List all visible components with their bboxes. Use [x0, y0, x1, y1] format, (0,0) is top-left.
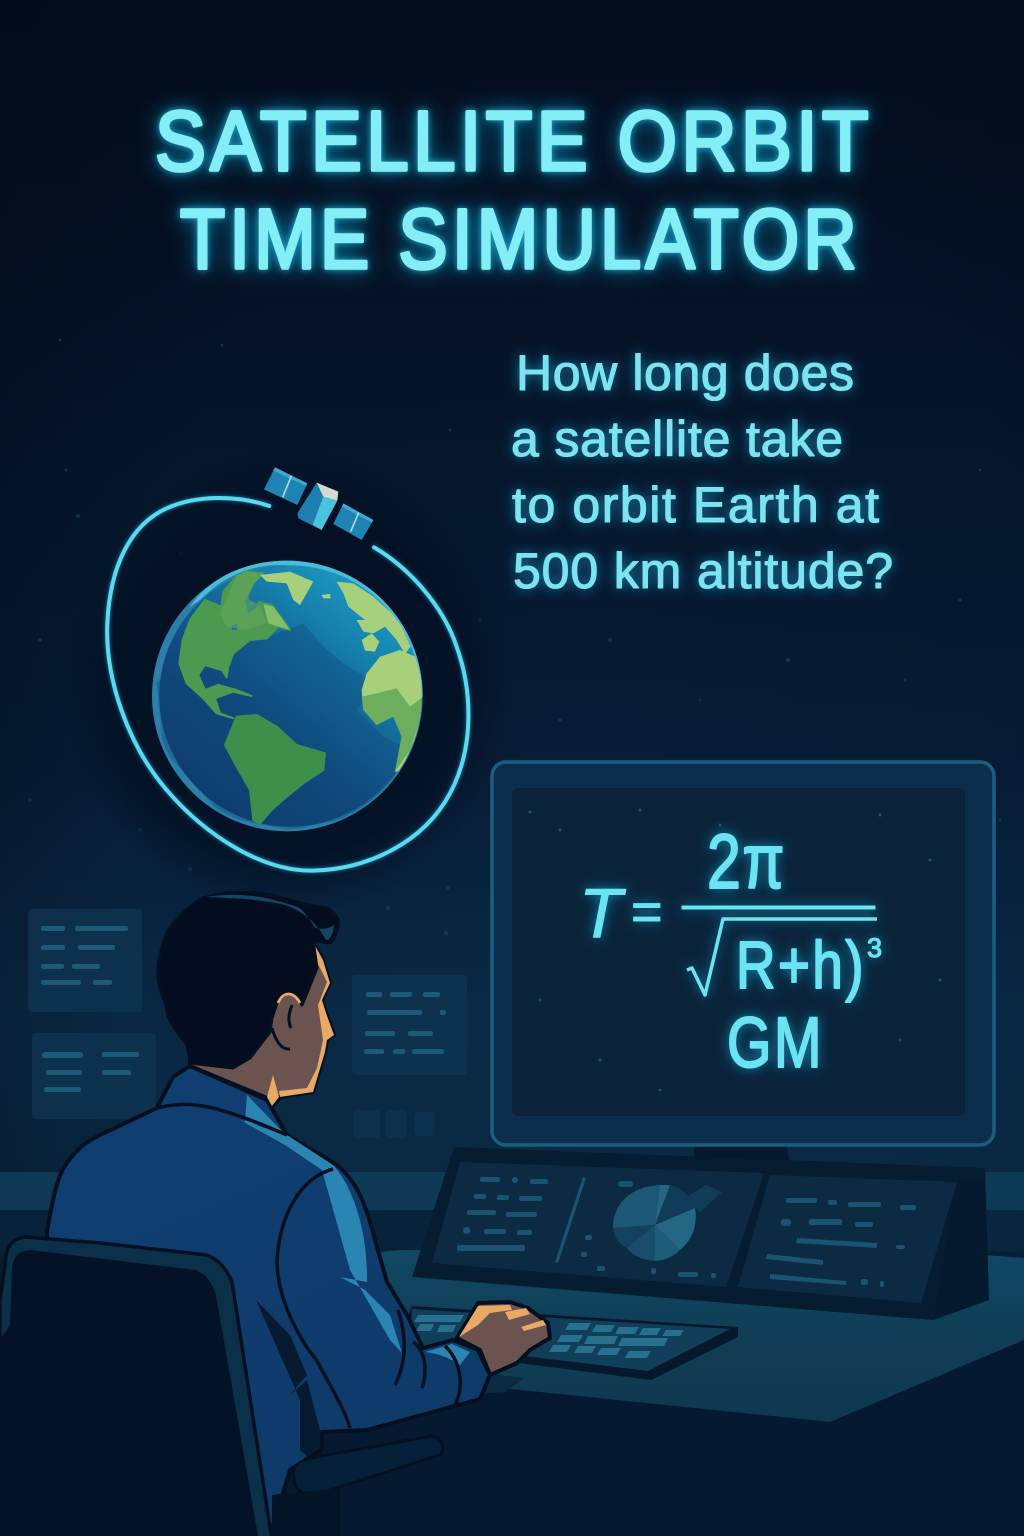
iceland: [322, 594, 331, 598]
dark halo behind earth: [63, 450, 513, 914]
console right screen: [738, 1175, 957, 1303]
title: TIME SIMULATOR: [180, 192, 861, 286]
formula: R+h): [736, 928, 866, 1003]
shirt highlight: [245, 1095, 283, 1132]
console left screen: [432, 1162, 764, 1287]
orbit ring: [107, 498, 468, 871]
chair back: [0, 1237, 272, 1536]
monitor frame: [492, 762, 994, 1145]
question text: [511, 345, 893, 599]
chair armrest: [293, 1436, 443, 1495]
iberia: [362, 633, 379, 652]
africa: [362, 650, 423, 772]
wall panel 1: [28, 909, 142, 1012]
hair: [158, 892, 338, 1068]
formula: 2π: [707, 819, 786, 905]
monitor stand: [694, 1130, 790, 1165]
question text: to orbit Earth at: [512, 477, 879, 533]
console bars: [457, 1177, 916, 1287]
computer monitor: [492, 762, 994, 1165]
head skin: [190, 942, 334, 1107]
pie chart: [613, 1185, 722, 1261]
formula: GM: [727, 1004, 824, 1083]
formula: T: [579, 874, 626, 952]
north america: [179, 572, 290, 718]
question text: How long does: [516, 345, 854, 401]
wall panel 2: [32, 1033, 156, 1119]
wall band behind desk: [0, 1172, 1024, 1252]
office chair: [0, 1237, 443, 1536]
shirt: [47, 1066, 490, 1536]
desk: [0, 1250, 1024, 1536]
control console: [412, 1147, 989, 1320]
formula: 3: [867, 933, 882, 963]
ear: [272, 994, 302, 1050]
europe: [337, 582, 411, 654]
formula: =: [631, 882, 663, 942]
person at desk: [47, 892, 550, 1536]
sleeve seam: [277, 1169, 350, 1428]
earth and orbit illustration: [102, 467, 482, 889]
small wall buttons: [353, 1110, 435, 1138]
question text: a satellite take: [511, 411, 843, 467]
hand: [457, 1302, 550, 1375]
question text: 500 km altitude?: [513, 543, 893, 599]
title: [155, 94, 873, 286]
formula: [579, 819, 882, 1083]
chair cushion: [0, 1250, 258, 1536]
wall panels: [28, 909, 467, 1138]
greenland: [260, 572, 313, 605]
wall panel 3: [352, 975, 467, 1075]
satellite: [264, 467, 373, 540]
monitor screen: [512, 788, 965, 1116]
ocean shading: [157, 623, 410, 830]
title: SATELLITE ORBIT: [155, 94, 873, 188]
earth globe: [152, 561, 423, 831]
south america: [225, 715, 325, 823]
keyboard: [400, 1306, 738, 1394]
